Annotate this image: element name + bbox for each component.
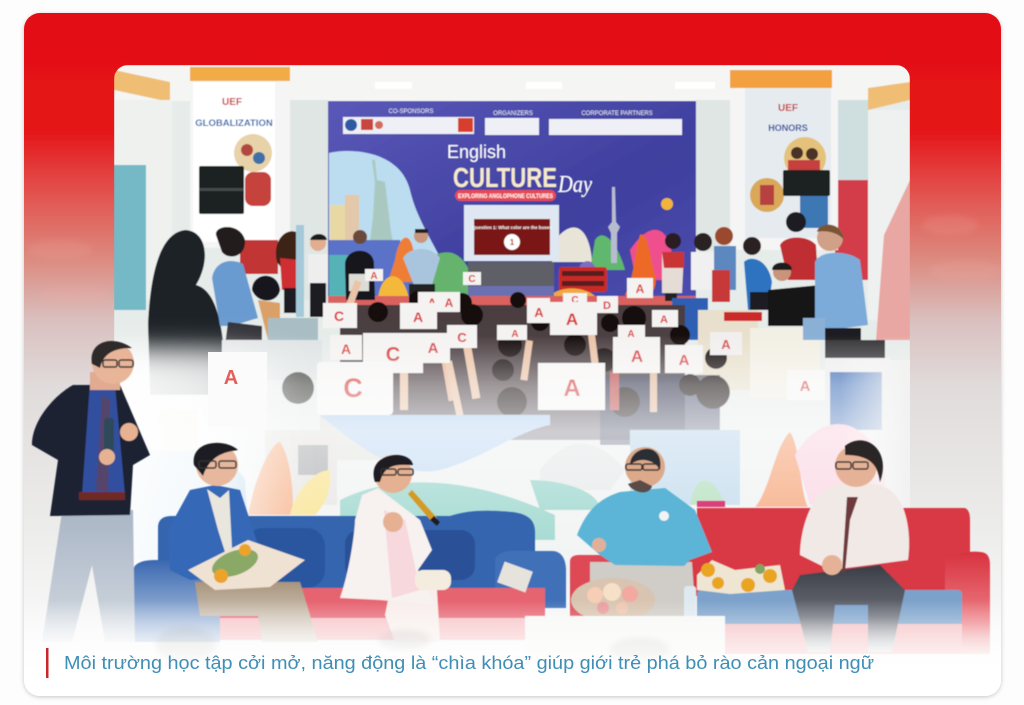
letter cards held up: A (631, 347, 643, 366)
event photo (100, 65, 910, 590)
audience dark crowd (282, 280, 730, 445)
screen with quiz (464, 205, 559, 261)
letter cards held up: A (413, 309, 423, 325)
blue sofa (133, 511, 566, 642)
caption accent bar (46, 648, 48, 678)
letter cards held up: A (445, 296, 454, 310)
letter cards held up: A (679, 352, 690, 369)
letter cards held up: D (603, 300, 611, 312)
stage backdrop banner: CO-SPONSORS (388, 109, 434, 115)
caption text: Môi trường học tập cởi mở, năng động là “chìa khóa” giúp giới trẻ phá bỏ rào cản ngoại ngữ (64, 652, 874, 673)
seated woman white blazer (340, 455, 451, 642)
letter cards held up: C (468, 274, 476, 285)
photo soft white haze (114, 335, 910, 565)
stage backdrop banner: Day (557, 172, 592, 198)
letter cards held up: A (370, 271, 378, 282)
stage backdrop banner (328, 101, 696, 307)
left pillar with GLOBALIZATION banner: GLOBALIZATION (195, 118, 273, 129)
letter cards held up: A (563, 375, 581, 402)
room wall and ceiling (114, 65, 910, 565)
letter cards held up: A (660, 314, 668, 326)
letter cards held up: C (386, 344, 400, 366)
flowers on red sofa (697, 560, 785, 594)
letter cards held up: A (534, 305, 544, 320)
stage backdrop banner: 1 (510, 238, 515, 247)
photo right fade (845, 360, 910, 486)
seated man white shirt (792, 440, 909, 652)
letter cards held up: A (636, 282, 645, 296)
left pillar with GLOBALIZATION banner (190, 67, 290, 248)
letter cards held up: A (428, 296, 437, 310)
banner title: English (447, 142, 506, 162)
stage backdrop banner: CULTURE (453, 162, 557, 193)
letter cards held up: C (457, 330, 467, 345)
floral centerpiece and table (525, 578, 725, 656)
seated man blue shirt (577, 447, 712, 640)
stage backdrop banner: CORPORATE PARTNERS (581, 111, 653, 117)
letter cards held up: A (511, 329, 519, 340)
stage backdrop banner: Question 1: What color are the buses (472, 225, 552, 230)
people at left table (148, 225, 328, 395)
stage backdrop banner: EXPLORING ANGLOPHONE CULTURES (458, 193, 554, 200)
lower banner illustrations (200, 414, 884, 540)
letter cards held up: A (428, 340, 439, 357)
card over left table (208, 352, 267, 395)
red sofa (570, 501, 990, 654)
photo left fade (120, 327, 298, 565)
seated man blue blazer (168, 443, 318, 642)
letter cards held up: A (800, 378, 811, 395)
right pillar with HONORS banner: UEF (778, 103, 798, 114)
two presenters on stage (345, 229, 440, 304)
panel discussion group (32, 341, 990, 656)
letter cards held up: A (566, 310, 578, 329)
letter cards held up: A (721, 337, 731, 352)
stage backdrop banner: ORGANIZERS (493, 111, 533, 117)
audience heads silhouettes near bottom (156, 627, 670, 663)
red stage floor (328, 295, 696, 306)
letter cards held up: C (334, 308, 344, 324)
letter cards held up: C (343, 373, 363, 403)
letter cards held up (317, 269, 825, 415)
right pillar with HONORS banner (730, 70, 838, 250)
letter cards held up: C (571, 295, 579, 306)
right pillar with HONORS banner: HONORS (768, 123, 808, 133)
card over left table: A (224, 367, 238, 389)
banner illustrations (328, 150, 439, 255)
left pillar with GLOBALIZATION banner: UEF (222, 97, 242, 108)
bottom white fade (42, 603, 990, 665)
letter cards held up: A (627, 329, 635, 340)
people at right table (662, 212, 890, 430)
letter cards held up: A (341, 341, 351, 357)
speakers (199, 166, 830, 214)
standing moderator (32, 341, 150, 642)
